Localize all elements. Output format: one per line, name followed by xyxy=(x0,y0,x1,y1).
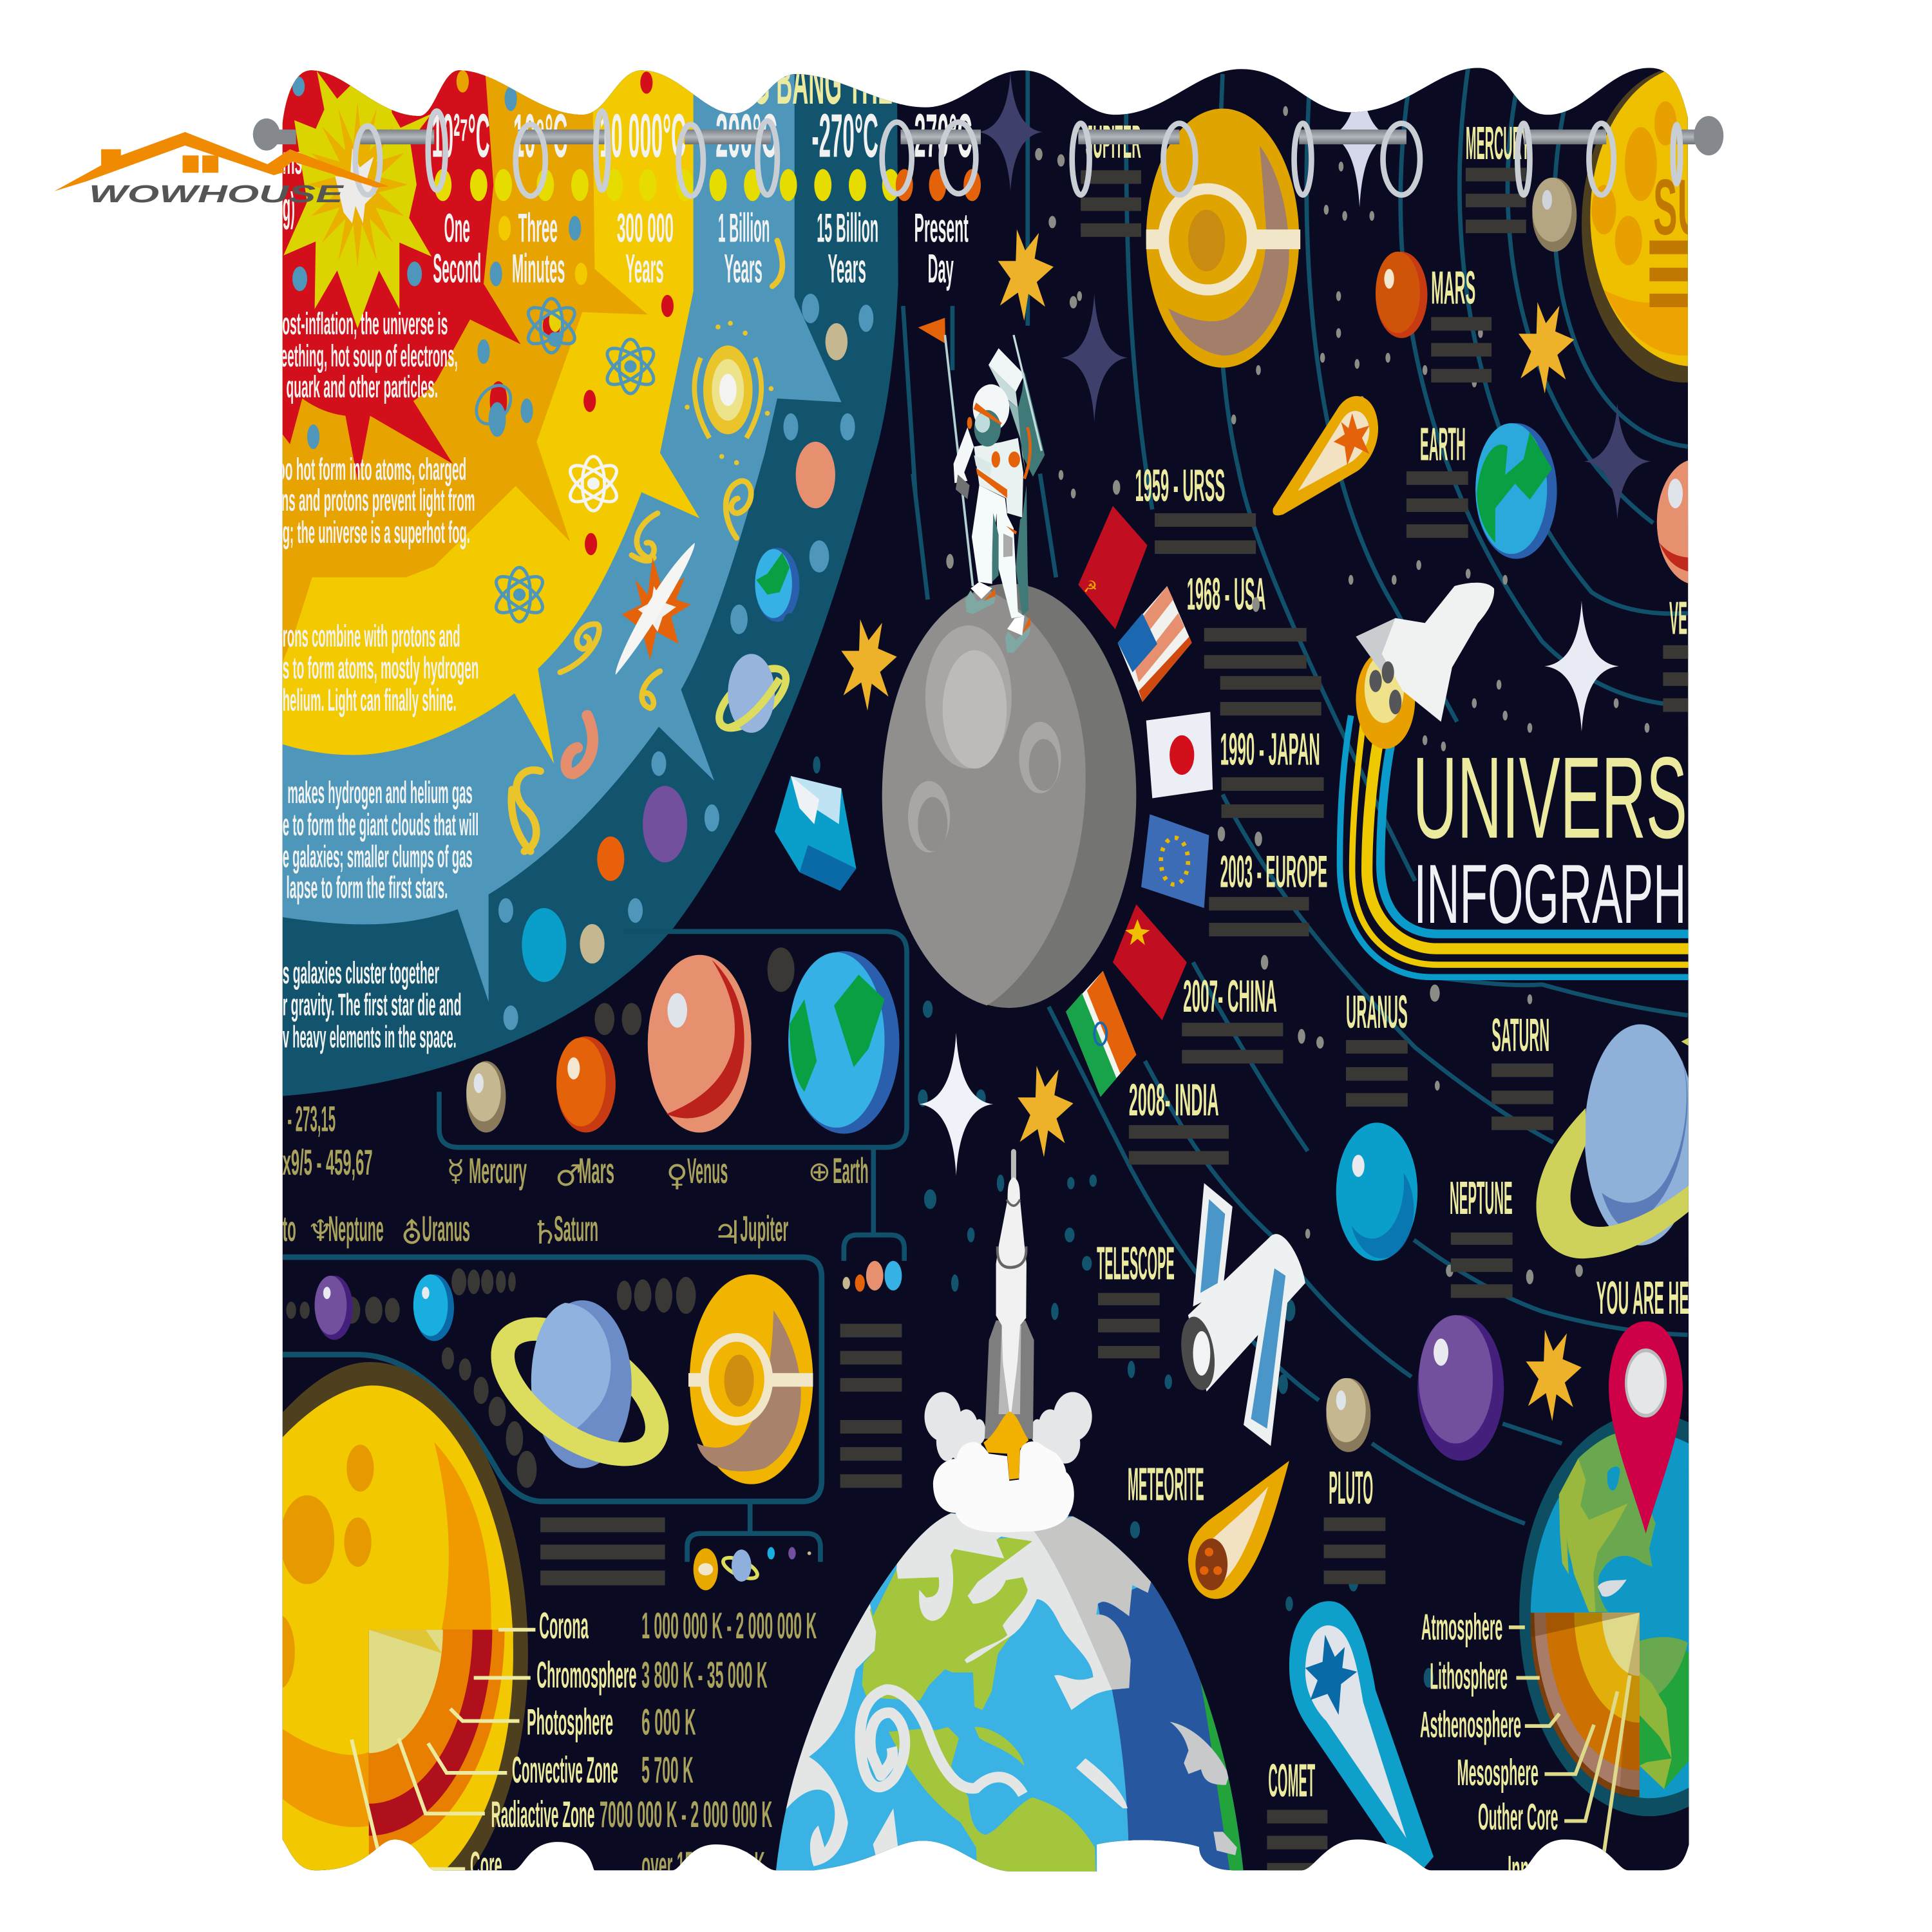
sun layer table: Corona xyxy=(539,1605,589,1647)
text block: 15 billion years xyxy=(283,956,461,1054)
curtain panel: e to form the giant clouds that will xyxy=(283,808,478,842)
timeline dots xyxy=(434,169,981,201)
logo: wowhouse xyxy=(54,132,388,208)
curtain panel: seething, hot soup of electrons, xyxy=(274,339,458,374)
planet legend row 1: ♀ xyxy=(666,1158,688,1193)
gold stars xyxy=(841,229,1582,1421)
label: jupiter xyxy=(1081,116,1141,237)
icon: jupiter xyxy=(688,1274,813,1484)
era dots and small icons xyxy=(292,70,873,1030)
timeline labels: 1 Billion xyxy=(718,205,770,251)
solar system: saturn xyxy=(1537,1025,1696,1258)
timeline labels: Day xyxy=(928,247,954,292)
curtain panel: quark and other particles. xyxy=(286,370,438,404)
flag: USSR: ☭ xyxy=(1083,578,1097,596)
icon: crater xyxy=(908,781,950,853)
curtain panel: BIG BANG THEORY xyxy=(730,46,940,118)
planet legend row 2: to xyxy=(283,1209,296,1249)
icon: blue planet xyxy=(413,1274,454,1341)
curtain panel: ns and protons prevent light from xyxy=(281,484,475,518)
connector and mini inner planets xyxy=(840,1148,904,1488)
orbit lines xyxy=(903,68,1688,1524)
curtain panel: TELESCOPE xyxy=(1097,1238,1175,1290)
planet legend row 2: ⛢ xyxy=(401,1216,422,1251)
planet legend row 1: ♂ xyxy=(555,1158,582,1193)
curtain panel: x9/5 - 459,67 xyxy=(283,1142,373,1182)
sun layer table: Convective Zone xyxy=(512,1750,618,1791)
text: temperature conversions xyxy=(283,1099,373,1182)
timeline labels: Minutes xyxy=(512,247,565,292)
icon: space shuttle xyxy=(1356,583,1494,749)
curtain panel: makes hydrogen and helium gas xyxy=(287,776,473,810)
curtain panel: PLUTO xyxy=(1329,1462,1373,1514)
planet legend row 2: Uranus xyxy=(422,1209,470,1249)
solar system: jupiter xyxy=(1146,109,1300,368)
solar system: neptune xyxy=(1336,1122,1417,1261)
solar system: pluto xyxy=(1326,1378,1370,1452)
curtain panel: 2003 - EUROPE xyxy=(1220,846,1327,897)
curtain panel: METEORITE xyxy=(1128,1459,1204,1511)
curtain panel: Jupiter xyxy=(740,1209,788,1249)
icon: saturn xyxy=(482,1300,678,1479)
curtain panel: v heavy elements in the space. xyxy=(283,1020,457,1054)
curtain panel: lapse to form the first stars. xyxy=(286,871,448,905)
earth layer labels: Mesosphere xyxy=(1457,1752,1539,1794)
icon: small earth xyxy=(755,548,799,622)
icon: astronaut xyxy=(918,317,1045,652)
flag timeline labels and bars: 1959 - URSS xyxy=(1135,460,1225,511)
planet legend row 1: Mercury xyxy=(469,1151,527,1191)
planet legend row 1: ☿ xyxy=(446,1153,465,1188)
timeline temperatures: 10⁹°C xyxy=(513,101,567,170)
curtain panel: NEPTUNE xyxy=(1450,1172,1513,1224)
icon: blue comet xyxy=(1289,1601,1434,1881)
earth layer labels: Lithosphere xyxy=(1430,1656,1508,1698)
curtain panel: helium. Light can finally shine. xyxy=(283,683,457,717)
planet legend row 2: Saturn xyxy=(554,1209,598,1249)
icon: crater xyxy=(1019,722,1061,793)
icon: space telescope xyxy=(1177,1183,1305,1446)
planet legend row 1 xyxy=(446,1151,869,1193)
logo: wowhouse: WOWHOUSE xyxy=(89,180,345,208)
timeline labels: ms xyxy=(283,138,302,183)
icon: big bang starburst xyxy=(283,71,431,328)
icon: sun cross section xyxy=(225,1362,528,1888)
curtain panel: r gravity. The first star die and xyxy=(283,989,461,1023)
label: earth xyxy=(1406,419,1468,538)
text: temperature conversions: - 273,15 xyxy=(287,1099,336,1139)
curtain panel: g; the universe is a superhot fog. xyxy=(283,516,470,550)
planet legend row 1: ⊕ xyxy=(808,1155,831,1187)
sun layer table: 6 000 K xyxy=(641,1701,696,1743)
curtain panel: Present xyxy=(914,205,969,251)
sun layer table: over 15 000 000 K xyxy=(641,1845,765,1886)
earth layer labels: Asthenosphere xyxy=(1420,1704,1521,1745)
scattered teal dots xyxy=(783,613,1434,1688)
curtain panel: MARS xyxy=(1431,261,1475,314)
label: pluto xyxy=(1324,1462,1385,1584)
icon: venus xyxy=(648,955,752,1133)
icon: quasar xyxy=(685,321,773,465)
curtain panel: SATURN xyxy=(1492,1009,1549,1061)
timeline labels: 300 000 xyxy=(617,205,674,251)
curtain panel: s galaxies cluster together xyxy=(283,956,439,990)
flag: USSR xyxy=(1078,506,1148,629)
solar system: mercury xyxy=(1532,178,1577,252)
panel: outer planets xyxy=(283,1257,822,1501)
icon: exploding star and comet streak xyxy=(616,543,695,675)
planet legend row 1: Mars xyxy=(578,1151,614,1191)
planets inside teal band xyxy=(522,548,799,982)
timeline labels: Years xyxy=(625,247,664,292)
text block: one second xyxy=(274,307,458,404)
sun layer table: 3 800 K - 35 000 K xyxy=(641,1655,768,1696)
curtain panel: Inner Core xyxy=(1508,1848,1579,1889)
curtain panel xyxy=(282,68,1689,1871)
icon: right rod finial xyxy=(1694,116,1723,155)
planet legend row 1: Venus xyxy=(687,1151,728,1191)
icon: crater xyxy=(925,625,1012,768)
curtain panel: Post-inflation, the universe is xyxy=(274,307,448,341)
band: light blue era xyxy=(271,50,842,1002)
curtain panel: COMET xyxy=(1268,1754,1315,1806)
icon: earth xyxy=(788,951,900,1134)
flags xyxy=(1066,506,1213,1097)
flag: Europe xyxy=(1141,814,1209,908)
band: red era xyxy=(271,50,520,481)
planet legend row 2: Neptune xyxy=(328,1209,384,1249)
cutaway earth xyxy=(1519,1413,1779,1816)
curtain panel: JUPITER xyxy=(1086,116,1141,168)
timeline labels: Three xyxy=(518,205,558,251)
solar system: uranus xyxy=(1417,1315,1504,1461)
text block: 1 billion years xyxy=(283,776,478,905)
earth layer labels: Atmosphere xyxy=(1421,1607,1502,1648)
icon: location pin xyxy=(1609,1321,1683,1533)
curtain panel: Outher Core xyxy=(1478,1797,1558,1838)
label: uranus xyxy=(1346,986,1408,1106)
timeline labels: Years xyxy=(828,247,866,292)
curtain panel: s to form atoms, mostly hydrogen xyxy=(283,652,478,686)
curtain panel: URANUS xyxy=(1346,986,1408,1038)
timeline labels: g) xyxy=(283,185,295,230)
curtain panel: oo hot form into atoms, charged xyxy=(278,453,466,487)
curtain panel: 270°C xyxy=(914,101,972,170)
placeholder bars under outer planets xyxy=(540,1517,665,1586)
label: neptune xyxy=(1450,1172,1513,1298)
icons: galaxies and swirls xyxy=(511,241,782,851)
band: yellow era xyxy=(271,50,699,764)
icon: diamond meteor xyxy=(775,776,857,891)
band: orange era xyxy=(282,70,648,663)
sun layer leader lines xyxy=(352,1630,535,1869)
timeline labels: Second xyxy=(433,247,481,292)
scattered star dots xyxy=(946,106,1649,1284)
curtain rod xyxy=(253,116,1723,155)
label: mercury xyxy=(1466,117,1530,233)
sun layer table: Radiactive Zone xyxy=(491,1794,594,1835)
curtain panel: rons combine with protons and xyxy=(283,620,460,654)
timeline temperatures: 200°C xyxy=(715,101,777,170)
icon: small saturn xyxy=(715,654,790,733)
flag timeline labels and bars: 2008- INDIA xyxy=(1129,1075,1219,1126)
sun layer table: Core xyxy=(470,1845,502,1886)
icon: meteorite xyxy=(1188,1461,1289,1599)
solar system: venus xyxy=(1657,459,1736,585)
moon xyxy=(882,583,1136,1008)
solar system: mars xyxy=(1376,252,1427,338)
flag: Japan xyxy=(1146,712,1213,798)
connector and mini outer planets xyxy=(687,1501,820,1590)
flag: China xyxy=(1113,904,1187,1020)
text block: 300000 years xyxy=(283,620,478,717)
curtain grommet rings xyxy=(355,111,1680,196)
solar system: sun: SUN xyxy=(1653,163,1730,251)
label: mars xyxy=(1431,261,1492,383)
timeline labels xyxy=(283,138,969,292)
icon: rocket launch xyxy=(925,1149,1092,1532)
solar system: earth xyxy=(1475,423,1557,559)
icon: mercury xyxy=(466,1061,506,1133)
title xyxy=(1412,734,1732,941)
flag timeline labels and bars: 2007- CHINA xyxy=(1183,971,1277,1022)
sun layer table: Photosphere xyxy=(527,1701,613,1743)
sparkle stars xyxy=(919,64,1651,1176)
curtain panel: 1 000 000 K - 2 000 000 K xyxy=(641,1605,817,1647)
flag timeline labels and bars: 1968 - USA xyxy=(1187,569,1266,620)
flag: USA xyxy=(1118,586,1192,702)
title stripes xyxy=(1340,715,1696,977)
timeline labels: Years xyxy=(724,247,762,292)
icon: purple planet xyxy=(315,1276,353,1340)
timeline labels: One xyxy=(444,205,470,251)
curtain panel: EARTH xyxy=(1420,419,1466,471)
label: telescope xyxy=(1097,1238,1175,1358)
label: venus xyxy=(1663,592,1716,712)
planet legend row 2: ♆ xyxy=(307,1213,334,1248)
sun layer table xyxy=(470,1605,817,1886)
big earth xyxy=(773,1510,1248,1885)
solar system: sun xyxy=(1582,66,1797,383)
label: saturn xyxy=(1492,1009,1553,1130)
band: dark teal era xyxy=(271,50,898,1097)
flag timeline labels and bars xyxy=(1129,460,1327,1164)
curtain panel: Earth xyxy=(833,1151,869,1191)
icon: orange comet xyxy=(1273,396,1378,515)
sun layer table: 7000 000 K - 2 000 000 K xyxy=(600,1794,772,1835)
planet legend row 2 xyxy=(283,1209,788,1251)
sun layer table: Chromosphere xyxy=(536,1655,637,1696)
curtain panel: VENUS xyxy=(1669,592,1716,645)
curtain panel: MERCURY xyxy=(1466,117,1530,169)
timeline temperatures: -270°C xyxy=(812,101,878,170)
flag: India xyxy=(1066,971,1136,1097)
timeline temperatures: 10²⁷°C xyxy=(431,101,490,170)
earth layer labels xyxy=(1420,1607,1579,1889)
icon: left rod finial xyxy=(253,118,296,151)
sun layer table: 5 700 K xyxy=(641,1750,694,1791)
timeline labels: 15 Billion xyxy=(817,205,878,251)
panel: inner planets xyxy=(439,931,907,1148)
planet legend row 2: ♃ xyxy=(713,1214,742,1251)
label: comet xyxy=(1267,1754,1327,1873)
curtain panel: 1990 - JAPAN xyxy=(1220,724,1320,775)
timeline temperatures xyxy=(433,113,972,157)
planet legend row 2: ♄ xyxy=(531,1214,559,1251)
curtain panel: e galaxies; smaller clumps of gas xyxy=(283,840,473,875)
timeline temperatures: 10 000°C xyxy=(600,101,686,170)
text block: three minutes xyxy=(278,453,475,550)
earth layer leader lines xyxy=(1509,1627,1630,1870)
icon: mars xyxy=(556,1036,616,1133)
